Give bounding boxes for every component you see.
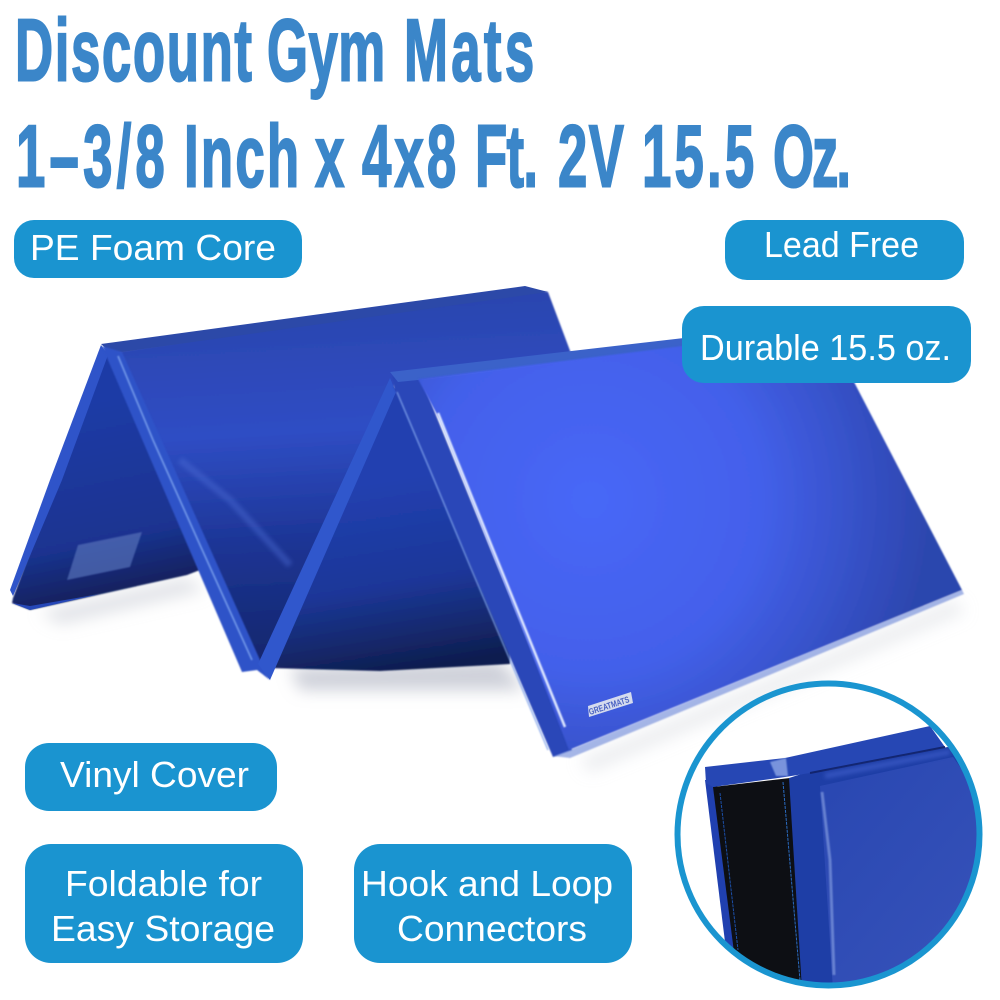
badge: Hook and Loop Connectors: Connectors bbox=[397, 908, 587, 949]
inset highlight bbox=[822, 792, 834, 975]
front mat: left edge strip bbox=[258, 378, 396, 680]
badge: Foldable for Easy Storage bbox=[25, 844, 303, 963]
title: Inch bbox=[184, 108, 299, 206]
back mat: main panel bbox=[115, 290, 572, 672]
title: Discount bbox=[15, 2, 252, 100]
top flap bbox=[705, 726, 945, 787]
velcro hook and loop bbox=[713, 778, 806, 990]
badge: Hook and Loop Connectors bbox=[354, 844, 632, 963]
front mat: highlight bbox=[438, 413, 565, 727]
title: 2V bbox=[558, 108, 624, 206]
badge: PE Foam Core: PE Foam Core bbox=[30, 227, 276, 268]
front mat: side strip bbox=[392, 376, 572, 757]
back mat: bottom flange bbox=[12, 594, 100, 610]
front mat: top edge bbox=[390, 322, 828, 382]
badge: Durable 15.5 oz.: Durable 15.5 oz. bbox=[700, 327, 951, 368]
inset main face bbox=[820, 757, 976, 982]
title: Oz. bbox=[773, 108, 851, 206]
title: 4x8 bbox=[362, 108, 456, 206]
badge: Lead Free bbox=[725, 220, 964, 280]
back mat: fold strip bbox=[102, 346, 270, 680]
title: Gym bbox=[267, 2, 385, 100]
badge: Hook and Loop Connectors: Hook and Loop bbox=[361, 863, 613, 904]
badge: Foldable for Easy Storage: Foldable for bbox=[65, 863, 262, 904]
title: 1–3/8 bbox=[16, 108, 165, 206]
velcro edge strip bbox=[705, 780, 734, 948]
badge: Foldable for Easy Storage: Easy Storage bbox=[51, 908, 275, 949]
badge: Durable 15.5 oz. bbox=[682, 306, 971, 383]
label on front mat: GREATMATS bbox=[588, 694, 631, 717]
title: Ft. bbox=[475, 108, 538, 206]
product photo: folded blue gym mat bbox=[10, 286, 965, 772]
floor shadows bbox=[40, 578, 965, 772]
front mat: inner panel bbox=[268, 388, 510, 671]
back mat: left edge strip bbox=[10, 345, 108, 596]
badge: Vinyl Cover bbox=[25, 743, 277, 811]
inset side strip bbox=[789, 747, 962, 982]
badge: PE Foam Core bbox=[14, 220, 302, 278]
title: 15.5 bbox=[642, 108, 754, 206]
badge: Vinyl Cover: Vinyl Cover bbox=[60, 754, 249, 795]
back mat: inner left panel bbox=[12, 350, 200, 610]
detail inset circle bbox=[678, 684, 990, 1000]
badge: Lead Free: Lead Free bbox=[764, 224, 919, 265]
title bbox=[15, 2, 851, 206]
back mat: top edge bbox=[101, 286, 548, 352]
title: Mats bbox=[404, 2, 534, 100]
front mat: right lower edge bbox=[553, 590, 964, 758]
front mat: main face bbox=[418, 328, 962, 750]
title: x bbox=[315, 108, 344, 206]
back mat: sheen bbox=[180, 460, 290, 565]
label on back mat bbox=[67, 532, 142, 580]
